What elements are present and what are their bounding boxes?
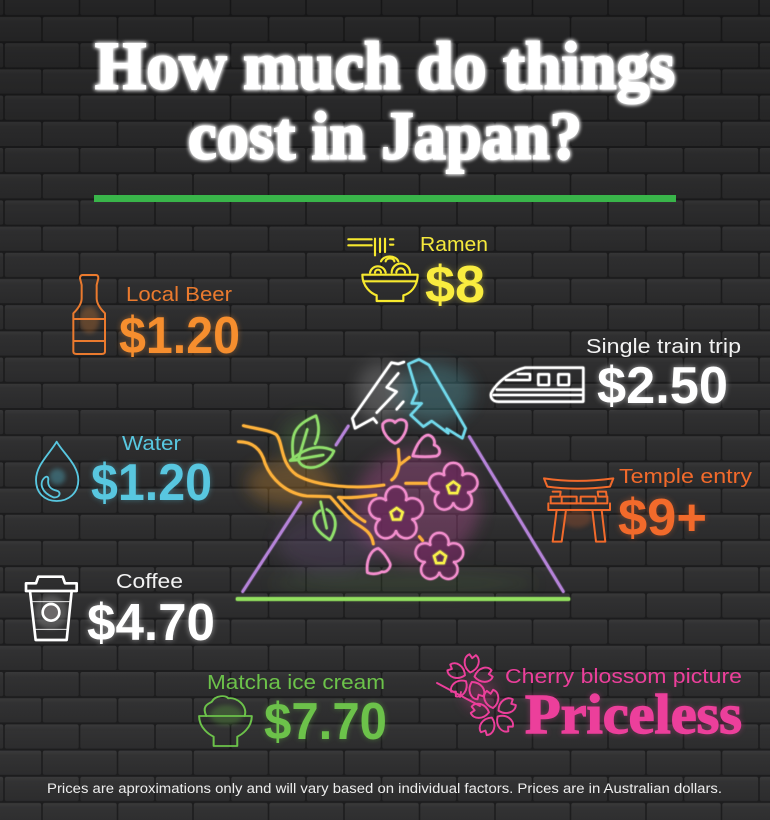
item: single train trip <box>491 335 741 414</box>
icon: cherry blossoms <box>437 651 522 740</box>
footnote: Prices are aproximations only and will vary based on individual factors. Prices are in Australian dollars. <box>47 781 722 796</box>
central neon illustration: Mount Fuji and cherry blossom <box>236 359 570 601</box>
price: water: $1.20 <box>91 453 212 511</box>
item: local beer <box>73 275 240 364</box>
icon: takeaway cup <box>26 577 77 640</box>
price: priceless: Priceless <box>525 684 742 746</box>
label: ramen: Ramen <box>420 233 488 256</box>
price: coffee: $4.70 <box>87 593 215 651</box>
price: matcha ice cream: $7.70 <box>264 692 387 750</box>
icon: bullet train <box>491 368 583 402</box>
label: temple entry: Temple entry <box>619 465 753 488</box>
pink petals <box>367 420 440 574</box>
mountain outline: white side <box>352 362 404 428</box>
icon: matcha bowl <box>199 696 252 746</box>
price: temple entry: $9+ <box>618 488 707 546</box>
label: coffee: Coffee <box>116 570 183 593</box>
cherry branch <box>238 426 427 544</box>
item: water <box>36 432 212 511</box>
label: cherry blossom picture: Cherry blossom picture <box>505 665 742 688</box>
icon: beer bottle <box>73 275 105 354</box>
blossom: lower <box>416 533 463 579</box>
mountain slopes <box>243 426 563 592</box>
icon: torii gate <box>544 478 613 542</box>
label: matcha ice cream: Matcha ice cream <box>207 671 385 694</box>
price: single train trip: $2.50 <box>597 356 728 414</box>
item: ramen <box>348 233 488 313</box>
blossom: right <box>429 463 477 510</box>
title <box>95 28 675 174</box>
label: water: Water <box>122 432 181 455</box>
title: How much do things <box>95 28 675 104</box>
icon: water drop <box>36 442 78 501</box>
item: temple entry <box>544 465 753 546</box>
item: cherry blossom picture <box>437 651 742 746</box>
ground line <box>236 597 570 601</box>
ambient neon glow <box>247 363 537 593</box>
price: ramen: $8 <box>425 255 485 313</box>
price: local beer: $1.20 <box>119 306 240 364</box>
label: single train trip: Single train trip <box>586 335 741 358</box>
item: matcha ice cream <box>199 671 387 750</box>
title: cost in Japan? <box>188 98 582 174</box>
label: local beer: Local Beer <box>126 283 232 306</box>
blossom: centre <box>369 487 423 538</box>
item: coffee <box>26 570 215 651</box>
title underline <box>94 195 676 202</box>
green leaves <box>290 416 335 540</box>
mountain outline: blue snow cap <box>408 359 466 438</box>
icon: ramen bowl <box>348 239 418 301</box>
